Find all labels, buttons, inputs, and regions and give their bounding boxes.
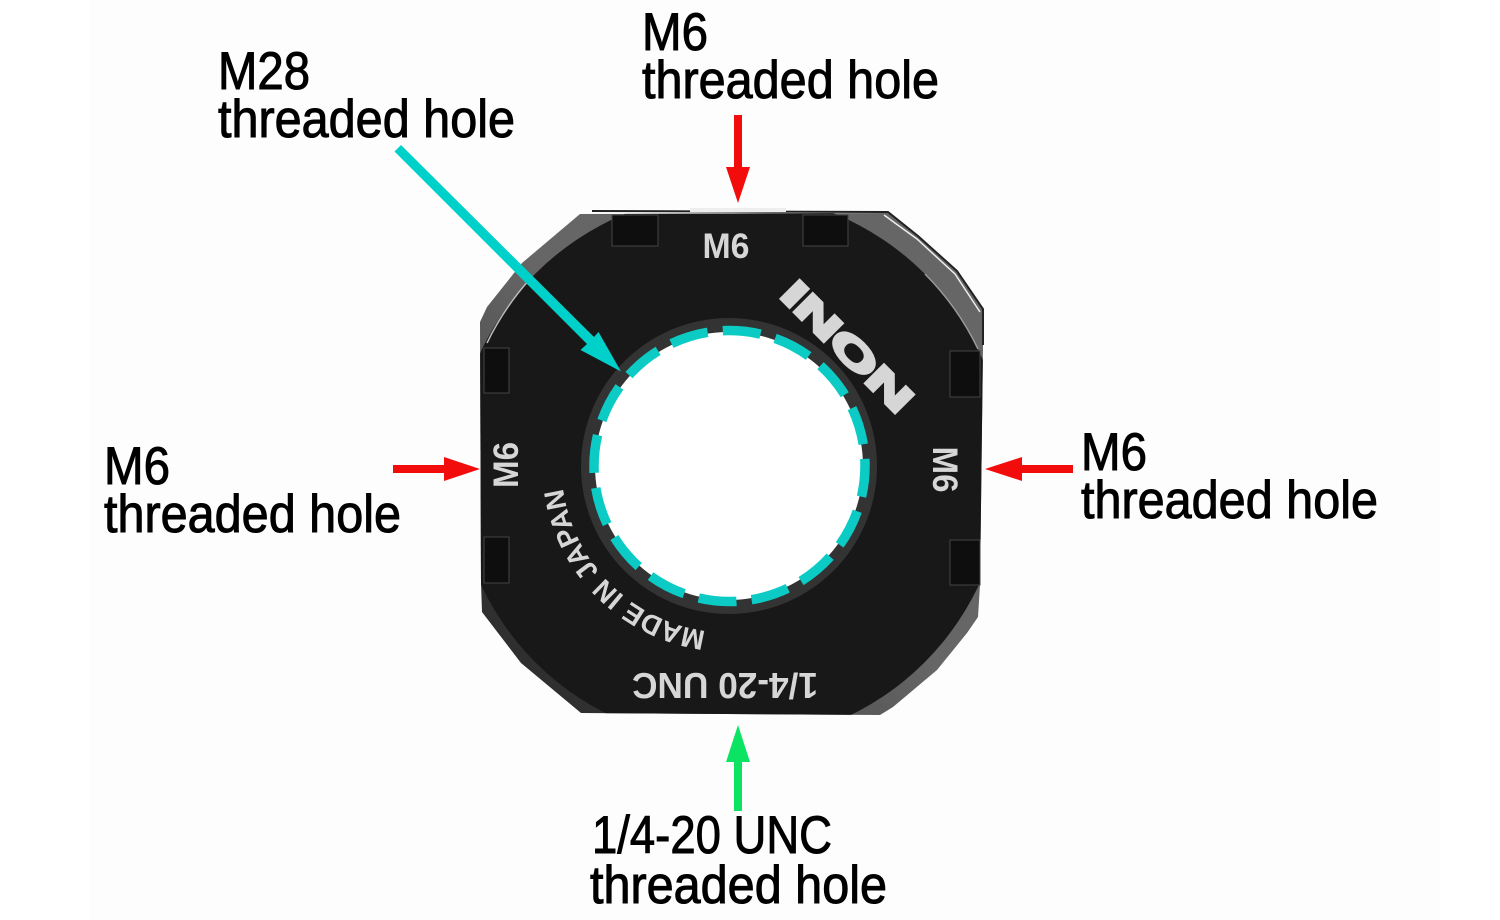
top and top-right outer edge <box>592 211 983 345</box>
label: left M6 threaded hole <box>104 437 401 544</box>
label: top M6 threaded hole: M6 <box>642 3 708 62</box>
engraved M6 top: M6 <box>702 227 750 266</box>
label: left M6 threaded hole: threaded hole <box>104 485 401 544</box>
label: M28 threaded hole <box>218 42 515 149</box>
side notches <box>484 348 980 585</box>
device: INON mount front view <box>480 208 984 715</box>
label: top M6 threaded hole <box>642 3 939 110</box>
arrow: bottom green <box>726 725 750 811</box>
engraved M6 left: M6 <box>487 442 526 488</box>
arrow: right red <box>985 457 1073 481</box>
label: right M6 threaded hole: M6 <box>1081 423 1147 482</box>
engraved MADE IN JAPAN: MADE IN JAPAN <box>544 490 704 650</box>
top edge highlight <box>690 208 786 212</box>
arrow: top red <box>726 115 750 203</box>
label: 1/4-20 UNC threaded hole: threaded hole <box>590 856 887 915</box>
label: top M6 threaded hole: threaded hole <box>642 51 939 110</box>
engraved M6 right: M6 <box>925 446 964 492</box>
engraved 1/4-20 UNC: 1/4-20 UNC <box>632 665 818 706</box>
label: right M6 threaded hole <box>1081 423 1378 530</box>
label: right M6 threaded hole: threaded hole <box>1081 471 1378 530</box>
arrow: M28 teal <box>394 145 621 372</box>
label: 1/4-20 UNC threaded hole <box>590 806 887 915</box>
label: 1/4-20 UNC threaded hole: 1/4-20 UNC <box>592 806 832 865</box>
label: left M6 threaded hole: M6 <box>104 437 170 496</box>
central hole <box>595 332 863 600</box>
engraved INON logo: INON <box>772 273 921 422</box>
black front face <box>480 213 983 715</box>
chamfer inner highlights <box>487 274 978 349</box>
label: M28 threaded hole: threaded hole <box>218 90 515 149</box>
top notches <box>612 215 848 246</box>
arrow: left red <box>393 457 480 481</box>
label: M28 threaded hole: M28 <box>218 42 310 101</box>
M28 thread dashed outline <box>587 324 872 608</box>
top-right edge highlight <box>884 215 980 312</box>
lens ring <box>581 318 877 614</box>
device body with chamfered corners <box>480 213 983 715</box>
